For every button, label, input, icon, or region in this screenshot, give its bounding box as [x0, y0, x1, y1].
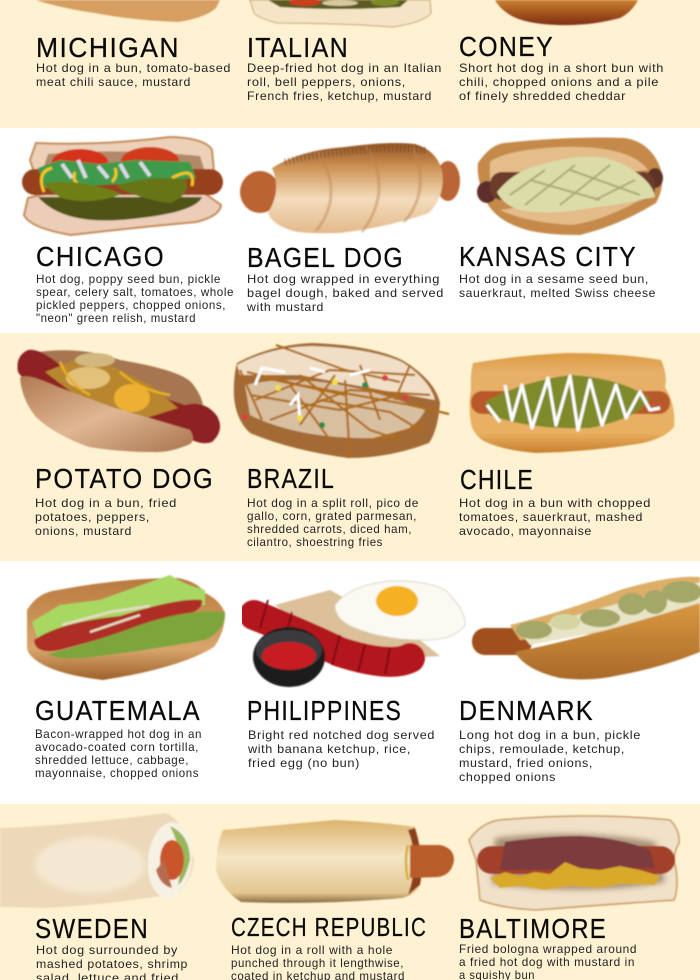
- description: [36, 943, 188, 980]
- description: [247, 61, 442, 103]
- panel: Denmark: [459, 577, 700, 784]
- description: Deep-fried hot dog in an Italian: [247, 61, 442, 75]
- panel: Chicago: [22, 137, 234, 325]
- description: chips, remoulade, ketchup,: [459, 742, 625, 756]
- heading: MICHIGAN: [36, 32, 180, 63]
- description: [231, 943, 405, 980]
- icon: Denmark hot dog: [472, 577, 700, 679]
- description: Hot dog wrapped in everything: [247, 272, 440, 286]
- heading: SWEDEN: [35, 913, 149, 944]
- description: fried egg (no bun): [248, 756, 360, 770]
- description: [35, 496, 177, 538]
- heading: KANSAS CITY: [459, 241, 637, 272]
- panel: Philippines: [247, 581, 465, 770]
- description: [246, 272, 444, 314]
- panel: Coney: [459, 0, 664, 103]
- description: Hot dog in a bun, tomato-based: [36, 61, 231, 75]
- description: of finely shredded cheddar: [459, 89, 626, 103]
- description: Hot dog in a bun with chopped: [459, 496, 651, 510]
- heading: CONEY: [459, 31, 554, 62]
- description: mustard, fried onions,: [459, 756, 593, 770]
- icon: Italian hot dog: [250, 0, 431, 27]
- description: roll, bell peppers, onions,: [247, 75, 406, 89]
- icon: Michigan hot dog: [36, 0, 220, 22]
- description: Fried bologna wrapped around: [459, 942, 637, 956]
- icon: Sweden wrap: [0, 813, 196, 908]
- icon: Guatemala hot dog: [27, 575, 225, 680]
- description: spear, celery salt, tomatoes, whole: [36, 285, 234, 299]
- description: Hot dog in a split roll, pico de: [247, 496, 419, 510]
- heading: DENMARK: [459, 695, 594, 726]
- description: mayonnaise, chopped onions: [35, 766, 199, 780]
- description: "neon" green relish, mustard: [36, 311, 196, 325]
- icon: Chile hot dog: [470, 353, 674, 453]
- description: [36, 272, 234, 325]
- panel: Sweden: [0, 813, 196, 980]
- description: with mustard: [246, 300, 324, 314]
- description: with banana ketchup, rice,: [247, 742, 411, 756]
- panel: Kansas City: [459, 138, 663, 300]
- description: Hot dog, poppy seed bun, pickle: [36, 272, 221, 286]
- icon: Coney hot dog: [495, 0, 638, 25]
- description: Hot dog surrounded by: [36, 943, 178, 957]
- description: shredded lettuce, cabbage,: [35, 753, 189, 767]
- panel: Italian: [247, 0, 442, 103]
- panel: Chile: [459, 353, 674, 538]
- description: meat chili sauce, mustard: [36, 75, 191, 89]
- description: Bacon-wrapped hot dog in an: [35, 727, 202, 741]
- panel: Brazil: [234, 343, 449, 549]
- description: mashed potatoes, shrimp: [36, 957, 188, 971]
- heading: PHILIPPINES: [247, 695, 402, 726]
- description: [459, 272, 656, 300]
- description: [459, 496, 651, 538]
- description: chopped onions: [459, 770, 556, 784]
- heading: BAGEL DOG: [247, 242, 404, 273]
- heading: POTATO DOG: [35, 463, 214, 494]
- description: bagel dough, baked and served: [247, 286, 444, 300]
- icon: Baltimore hot dog: [469, 816, 679, 910]
- icon: bagel dog: [240, 143, 460, 233]
- panel: Czech Republic: [216, 820, 454, 980]
- description: cilantro, shoestring fries: [247, 535, 383, 549]
- description: French fries, ketchup, mustard: [247, 89, 432, 103]
- icon: Brazil hot dog: [234, 343, 449, 458]
- panel: Potato dog: [17, 350, 220, 538]
- description: avocado-coated corn tortilla,: [35, 740, 199, 754]
- heading: ITALIAN: [247, 32, 349, 63]
- description: Long hot dog in a bun, pickle: [459, 728, 641, 742]
- icon: potato dog: [17, 350, 220, 452]
- description: [459, 61, 664, 103]
- description: punched through it lengthwise,: [231, 956, 404, 970]
- heading: BRAZIL: [247, 463, 335, 494]
- description: pickled peppers, chopped onions,: [36, 298, 226, 312]
- description: shredded carrots, diced ham,: [247, 522, 412, 536]
- heading: GUATEMALA: [35, 695, 201, 726]
- description: sauerkraut, melted Swiss cheese: [459, 286, 656, 300]
- description: tomatoes, sauerkraut, mashed: [459, 510, 643, 524]
- description: [247, 496, 419, 549]
- description: Hot dog in a sesame seed bun,: [459, 272, 649, 286]
- icon: Kansas City hot dog: [477, 138, 663, 235]
- description: chili, chopped onions and a pile: [459, 75, 659, 89]
- panel: Guatemala: [27, 575, 225, 780]
- heading: CHICAGO: [36, 241, 165, 272]
- description: [247, 728, 435, 770]
- description: avocado, mayonnaise: [459, 524, 592, 538]
- icon: Philippines plate: [253, 581, 465, 687]
- description: gallo, corn, grated parmesan,: [247, 509, 417, 523]
- description: [459, 942, 637, 980]
- panel: Baltimore: [459, 816, 679, 980]
- icon: Czech hot dog: [216, 820, 454, 903]
- description: Short hot dog in a short bun with: [459, 61, 664, 75]
- description: [36, 61, 231, 89]
- description: Hot dog in a bun, fried: [35, 496, 177, 510]
- description: Bright red notched dog served: [248, 728, 435, 742]
- heading: CZECH REPUBLIC: [231, 912, 427, 942]
- description: [35, 727, 202, 780]
- panel: Bagel dog: [240, 143, 460, 314]
- icon: Chicago hot dog: [22, 137, 223, 235]
- panel: Michigan: [36, 0, 231, 89]
- description: [459, 728, 641, 784]
- description: Hot dog in a roll with a hole: [231, 943, 393, 957]
- heading: CHILE: [460, 464, 534, 495]
- description: onions, mustard: [35, 524, 132, 538]
- description: potatoes, peppers,: [35, 510, 150, 524]
- heading: BALTIMORE: [459, 913, 607, 944]
- description: a fried hot dog with mustard in: [459, 955, 635, 969]
